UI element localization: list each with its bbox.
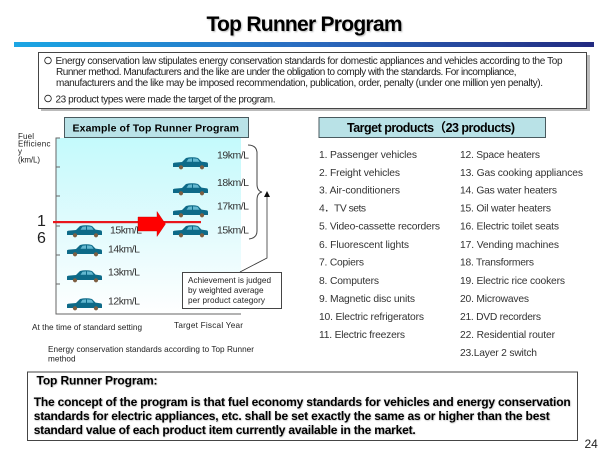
definition body: standard value of each product item currently available in the market. [34,424,416,438]
red level number 16: 1 [37,213,46,230]
cars target year [173,157,208,237]
car labels at standard setting: 14km/L [108,244,140,256]
list: target products column 2: 16. Electric toilet seats [460,222,559,232]
panel: top runner program definition [28,372,578,440]
panel: program description [38,52,590,111]
callout: achievement [182,272,282,308]
chart caption: Energy conservation standards according to Top Runner [48,345,254,354]
list: target products column 1: 5. Video-cassette recorders [319,222,440,232]
definition body [34,395,571,438]
heading: target products [319,118,546,138]
list: target products column 1: 1. Passenger vehicles [319,150,417,161]
callout: achievement: by weighted average [188,286,264,295]
title: Top Runner Program [208,14,404,37]
definition heading: Top Runner Program: [36,374,158,388]
red level number 16: 6 [37,230,46,247]
definition body: The concept of the program is that fuel economy standards for vehicles and energy conservation [34,395,571,409]
y axis label [18,132,50,164]
arrow: callout to brace [240,191,270,272]
y axis label: Efficienc [18,140,50,148]
panel: program description: Energy conservation law stipulates energy conservation standards for domestic appliances and vehicles according to the Top [56,56,563,67]
list: target products column 2: 22. Residential router [460,330,556,341]
callout: achievement: per product category [188,296,266,305]
red standard line [53,221,201,223]
list: target products column 2: 21. DVD recorders [460,312,541,323]
callout: achievement: Achievement is judged [188,276,271,285]
list: target products column 1: 4．TV sets [319,204,366,214]
car labels at standard setting: 13km/L [108,266,140,278]
car labels at standard setting: 12km/L [108,296,140,308]
y axis label: (km/L) [18,156,40,164]
heading: example of top runner program: Example of Top Runner Program [72,122,239,134]
list: target products column 2: 20. Microwaves [460,294,529,305]
brace: target year cars [248,145,262,239]
list: target products column 1: 6. Fluorescent lights [319,240,409,251]
chart caption: method [48,354,76,364]
gradient header bar [14,42,594,47]
definition heading: Top Runner Program: [37,374,158,388]
car labels target year: 19km/L [217,150,249,162]
list: target products column 1: 7. Copiers [319,258,364,268]
heading: example of top runner program [64,118,248,138]
red level number 16 [37,213,46,247]
red arrow [138,212,166,236]
definition body: standards for electric appliances, etc. shall be set exactly the same as or higher than the best [34,410,550,424]
list: target products column 2 [460,150,583,359]
panel: program description: Runner method. Manufacturers and the like are under the obligation to comply with the standards. For incompliance, [56,67,516,78]
list: target products column 1: 8. Computers [319,276,379,287]
car labels target year [217,150,249,236]
axis caption: target fiscal year: Target Fiscal Year [174,321,243,330]
list: target products column 1: 11. Electric freezers [319,330,405,341]
chart: fuel efficiency [18,132,249,314]
y axis label: Fuel [18,132,34,141]
y axis label: y [18,147,22,156]
list: target products column 2: 14. Gas water heaters [460,186,557,196]
panel: program description: 23 product types were made the target of the program. [56,94,276,106]
chart caption [48,345,254,364]
list: target products column 2: 15. Oil water heaters [460,204,551,214]
list: target products column 2: 19. Electric rice cookers [460,276,565,287]
car labels at standard setting: 15km/L [110,224,142,236]
car labels at standard setting [108,224,142,308]
list: target products column 1: 9. Magnetic disc units [319,294,415,305]
car labels target year: 17km/L [217,200,249,212]
list: target products column 2: 12. Space heaters [460,150,540,161]
definition body: standards for electric appliances, etc. shall be set exactly the same as or higher than the best [34,409,550,423]
heading: target products: Target products（23 products) [347,121,515,135]
car labels target year: 15km/L [217,224,249,236]
panel: program description: manufacturers and the like may be imposed recommendation, publication, order, penalty (under one million yen penalty). [56,78,543,89]
car labels target year: 18km/L [217,177,249,189]
cars at standard setting [67,225,102,310]
list: target products column 1: 10. Electric refrigerators [319,312,424,323]
definition body: The concept of the program is that fuel economy standards for vehicles and energy conservation [34,396,571,410]
list: target products column 1: 2. Freight vehicles [319,168,400,179]
definition body: standard value of each product item currently available in the market. [34,423,416,437]
title: Top Runner Program [206,13,402,36]
list: target products column 2: 23.Layer 2 switch [460,348,537,359]
list: target products column 1: 3. Air-conditioners [319,186,400,196]
list: target products column 2: 17. Vending machines [460,240,559,251]
axis caption: standard setting: At the time of standard setting [32,323,142,332]
list: target products column 1 [319,150,440,341]
list: target products column 2: 13. Gas cooking appliances [460,168,583,179]
list: target products column 2: 18. Transformers [460,258,534,268]
